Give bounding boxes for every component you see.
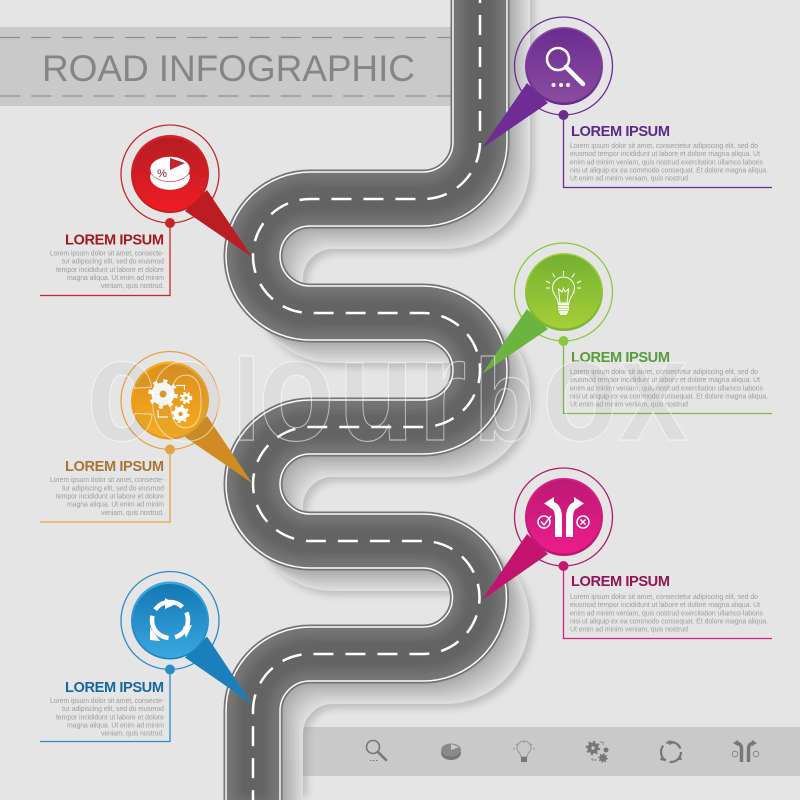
text block: tur adipiscing elit, sed do eiusmod: [62, 706, 164, 713]
bottom icon: forked arrows: [732, 740, 759, 762]
text block: enim ad minim veniam, quis nostrud exercitation ullamco laboris: [570, 610, 764, 617]
road: [253, 0, 480, 800]
text block: eiusmod tempor incididunt ut labore et dolore magna aliqua. Ut: [570, 377, 760, 384]
ring and connector: [40, 125, 219, 296]
icon: light bulb: [546, 271, 581, 314]
text block: magna aliqua. Ut enim ad minim: [67, 502, 164, 509]
bottom icon: light bulb: [513, 741, 535, 762]
ring and connector: [40, 352, 219, 522]
watermark: b: [474, 335, 535, 465]
text block: [50, 250, 164, 290]
text block: eiusmod tempor incididunt ut labore et dolore magna aliqua. Ut: [570, 151, 760, 158]
text block: [570, 594, 768, 634]
text block: enim ad minim veniam, quis nostrud exercitation ullamco laboris: [570, 385, 764, 392]
pin: [482, 253, 603, 374]
text block: tur adipiscing elit, sed do eiusmod: [62, 485, 164, 492]
text block: veniam, quis nostrud.: [101, 731, 164, 738]
icon: cycle arrows: [150, 598, 192, 641]
heading: LOREM IPSUM: [65, 680, 164, 696]
text block: enim ad minim veniam, quis nostrud exercitation ullamco laboris: [570, 159, 764, 166]
ring and connector: [514, 468, 772, 638]
bottom icon: cycle arrows: [660, 740, 682, 762]
text block: Ut enim ad minim veniam, quis nostrud: [570, 402, 688, 409]
text block: tur adipiscing elit, sed do eiusmod: [62, 259, 164, 266]
pin: [131, 135, 252, 257]
bottom icon bar: [303, 727, 800, 776]
panel: magenta step: [482, 468, 772, 638]
text block: [570, 143, 768, 183]
text block: tempor incididunt ut labore et dolore: [56, 267, 164, 274]
text block: Ut enim ad minim veniam, quis nostrud: [570, 627, 688, 634]
road centre dashes: [253, 0, 480, 800]
pin: [131, 582, 252, 704]
watermark: ox: [542, 307, 688, 471]
icon: gears: [150, 382, 191, 422]
text block: Lorem ipsum dolor sit amet, consectetur adipiscing elit, sed do: [570, 369, 758, 376]
panel: green step: [482, 243, 772, 414]
pin: [482, 27, 603, 148]
heading: LOREM IPSUM: [571, 574, 670, 590]
ring and connector: [40, 572, 219, 742]
heading: LOREM IPSUM: [571, 124, 670, 140]
watermark: our: [258, 307, 467, 471]
text block: nisi ut aliquip ex ea commodo consequat. Et dolore magna aliqua.: [570, 168, 768, 174]
title: ROAD INFOGRAPHIC: [42, 48, 415, 89]
text block: Lorem ipsum dolor sit amet, consecte-: [50, 477, 164, 484]
ring and connector: [514, 17, 772, 188]
pin: [131, 362, 252, 483]
watermark: [87, 307, 688, 471]
icon: forked arrows: [538, 497, 589, 537]
icon: pie coin: %: [157, 168, 167, 180]
text block: Ut enim ad minim veniam, quis nostrud: [570, 176, 688, 183]
text block: Lorem ipsum dolor sit amet, consecte-: [50, 698, 164, 705]
bottom icon: gears: [587, 742, 608, 762]
road layered shadow: [254, 0, 507, 800]
watermark: co: [87, 307, 224, 471]
panel: purple step: [482, 17, 772, 188]
text block: [50, 698, 164, 738]
text block: tempor incididunt ut labore et dolore: [56, 714, 164, 721]
text block: nisi ut aliquip ex ea commodo consequat. Et dolore magna aliqua.: [570, 618, 768, 626]
panel: blue step: [40, 572, 252, 742]
heading: LOREM IPSUM: [65, 459, 164, 475]
heading: LOREM IPSUM: [571, 350, 670, 366]
text block: Lorem ipsum dolor sit amet, consectetur adipiscing elit, sed do: [570, 594, 758, 601]
ring and connector: [514, 243, 772, 414]
icon: pie coin: [150, 156, 190, 190]
text block: tempor incididunt ut labore et dolore: [56, 494, 164, 500]
text block: nisi ut aliquip ex ea commodo consequat. Et dolore magna aliqua.: [570, 394, 768, 400]
panel: orange step: [40, 352, 252, 522]
bottom icon: pie coin: [441, 744, 461, 760]
text block: Lorem ipsum dolor sit amet, consectetur adipiscing elit, sed do: [570, 143, 758, 150]
text block: Lorem ipsum dolor sit amet, consecte-: [50, 250, 164, 258]
text block: [50, 477, 164, 517]
text block: veniam, quis nostrud.: [101, 283, 164, 290]
text block: veniam, quis nostrud.: [101, 510, 164, 517]
text block: magna aliqua. Ut enim ad minim: [67, 275, 164, 282]
heading: LOREM IPSUM: [65, 232, 164, 248]
text block: eiusmod tempor incididunt ut labore et dolore magna aliqua. Ut: [570, 602, 760, 609]
bottom icon: magnifier: [366, 740, 386, 760]
icon: magnifier: [547, 48, 583, 87]
text block: [570, 369, 768, 409]
title banner: [0, 27, 452, 106]
text block: magna aliqua. Ut enim ad minim: [67, 722, 164, 730]
watermark: l: [233, 335, 260, 465]
panel: red step: [40, 125, 252, 296]
pin: [482, 478, 603, 600]
